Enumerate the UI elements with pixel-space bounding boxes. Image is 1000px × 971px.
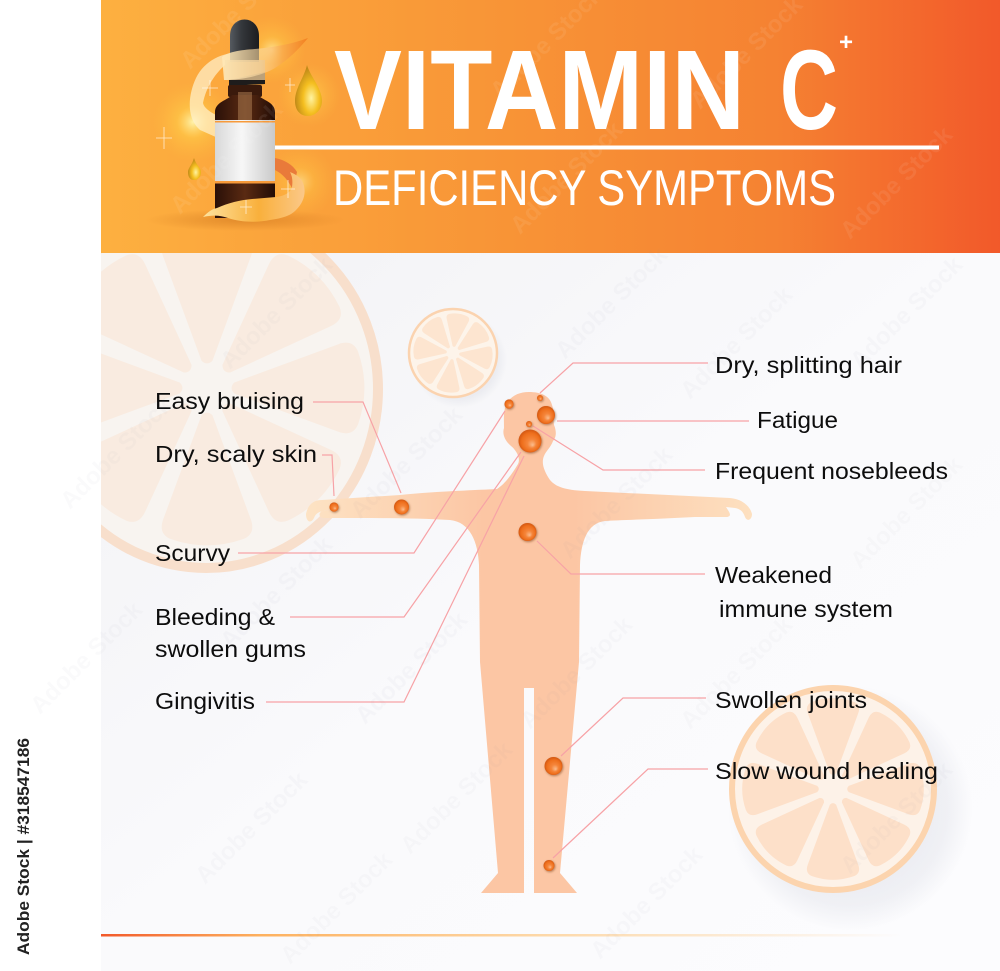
watermark text: Adobe Stock — [395, 736, 518, 859]
marker: wound — [544, 860, 554, 871]
marker: hair — [537, 395, 543, 401]
line: gingivitis — [266, 456, 524, 702]
marker: immune system — [518, 523, 536, 541]
title: C — [780, 27, 838, 153]
watermark text: Adobe Stock — [550, 241, 673, 364]
line: weakened immune system — [537, 541, 705, 574]
glow spots — [153, 82, 233, 162]
marker: fatigue — [537, 406, 555, 424]
left labels — [155, 388, 317, 714]
label: scurvy: Scurvy — [155, 540, 230, 566]
bottle highlight — [238, 92, 252, 120]
front ribbon upper — [222, 38, 308, 80]
line: scurvy — [238, 411, 505, 553]
label: frequent nosebleeds: Frequent nosebleeds — [715, 458, 948, 484]
marker: nose — [526, 421, 532, 427]
label: slow wound healing: Slow wound healing — [715, 758, 938, 784]
small orange slice — [408, 308, 507, 408]
human body silhouette — [306, 392, 752, 893]
content panel — [101, 253, 1000, 971]
bottle neck — [228, 85, 262, 97]
watermark text: Adobe Stock — [345, 401, 468, 524]
marker: skin — [329, 502, 339, 512]
marker: mouth — [518, 430, 542, 452]
watermark text: Adobe Stock — [675, 611, 798, 734]
subtitle: DEFICIENCY SYMPTOMS — [333, 160, 836, 216]
label: easy bruising: Easy bruising — [155, 388, 304, 414]
stock credit in margin: Adobe Stock | #318547186 — [14, 738, 33, 955]
bottle floor shadow — [145, 209, 345, 231]
line: swollen joints — [561, 698, 706, 756]
watermark text: Adobe Stock — [275, 846, 398, 969]
watermark text: Adobe Stock — [25, 596, 148, 719]
watermark text: Adobe Stock — [845, 251, 968, 374]
watermark text: Adobe Stock — [515, 611, 638, 734]
icon: small oil drop — [188, 158, 201, 180]
bottle body — [215, 95, 275, 218]
label: fatigue: Fatigue — [757, 407, 838, 433]
watermark text: Adobe Stock — [835, 756, 958, 879]
line: dry splitting hair — [540, 363, 708, 393]
label: swollen joints: Swollen joints — [715, 687, 867, 713]
footer rule — [101, 934, 901, 936]
dropper collar — [229, 72, 265, 86]
callout lines — [238, 363, 749, 858]
watermark text: Adobe Stock — [555, 441, 678, 564]
watermark text: Adobe Stock — [350, 606, 473, 729]
line: dry scaly skin — [322, 455, 334, 496]
watermark text: Adobe Stock — [835, 121, 958, 244]
line: easy bruising — [313, 402, 401, 493]
large orange slice — [101, 253, 383, 573]
line: fatigue — [557, 420, 749, 422]
watermark text: Adobe Stock — [55, 391, 178, 514]
label: dry scaly skin: Dry, scaly skin — [155, 441, 317, 467]
ribbon right side — [275, 158, 297, 190]
icon: vitamin serum bottle — [145, 16, 345, 231]
marker: gums — [504, 399, 514, 409]
line: bleeding and swollen gums — [290, 452, 521, 617]
label: bleeding and swollen gums: Bleeding & — [155, 604, 275, 630]
label: bleeding and swollen gums: swollen gums — [155, 636, 306, 662]
symptom markers — [329, 395, 562, 871]
dropper bulb — [230, 20, 259, 62]
watermark text: Adobe Stock — [845, 451, 968, 574]
line: slow wound healing — [553, 769, 708, 858]
watermark text: Adobe Stock — [675, 281, 798, 404]
label trim — [215, 121, 275, 122]
watermark text: Adobe Stock — [505, 116, 628, 239]
right labels — [715, 352, 948, 784]
label: dry splitting hair: Dry, splitting hair — [715, 352, 902, 378]
label: weakened immune system: Weakened — [715, 562, 832, 588]
marker: bruising — [394, 500, 409, 514]
line: frequent nosebleeds — [533, 426, 705, 470]
marker: joints — [544, 757, 562, 775]
title rule — [275, 146, 939, 150]
bottom right orange slice — [728, 686, 972, 930]
rear ribbon left — [190, 52, 240, 138]
bottle label — [215, 120, 275, 183]
watermark text: Adobe Stock — [165, 96, 288, 219]
label: gingivitis: Gingivitis — [155, 688, 255, 714]
watermark text: Adobe Stock — [190, 766, 313, 889]
watermark text: Adobe Stock — [215, 531, 338, 654]
label: weakened immune system: immune system — [719, 596, 893, 622]
sparkles — [156, 78, 295, 214]
watermark text: Adobe Stock — [215, 251, 338, 374]
watermark text: Adobe Stock — [585, 841, 708, 964]
title plus sign: + — [839, 29, 853, 56]
front ribbon lower — [203, 172, 305, 222]
header banner — [101, 0, 1000, 253]
icon: large oil drop — [277, 63, 341, 127]
title: VITAMIN — [334, 27, 745, 153]
